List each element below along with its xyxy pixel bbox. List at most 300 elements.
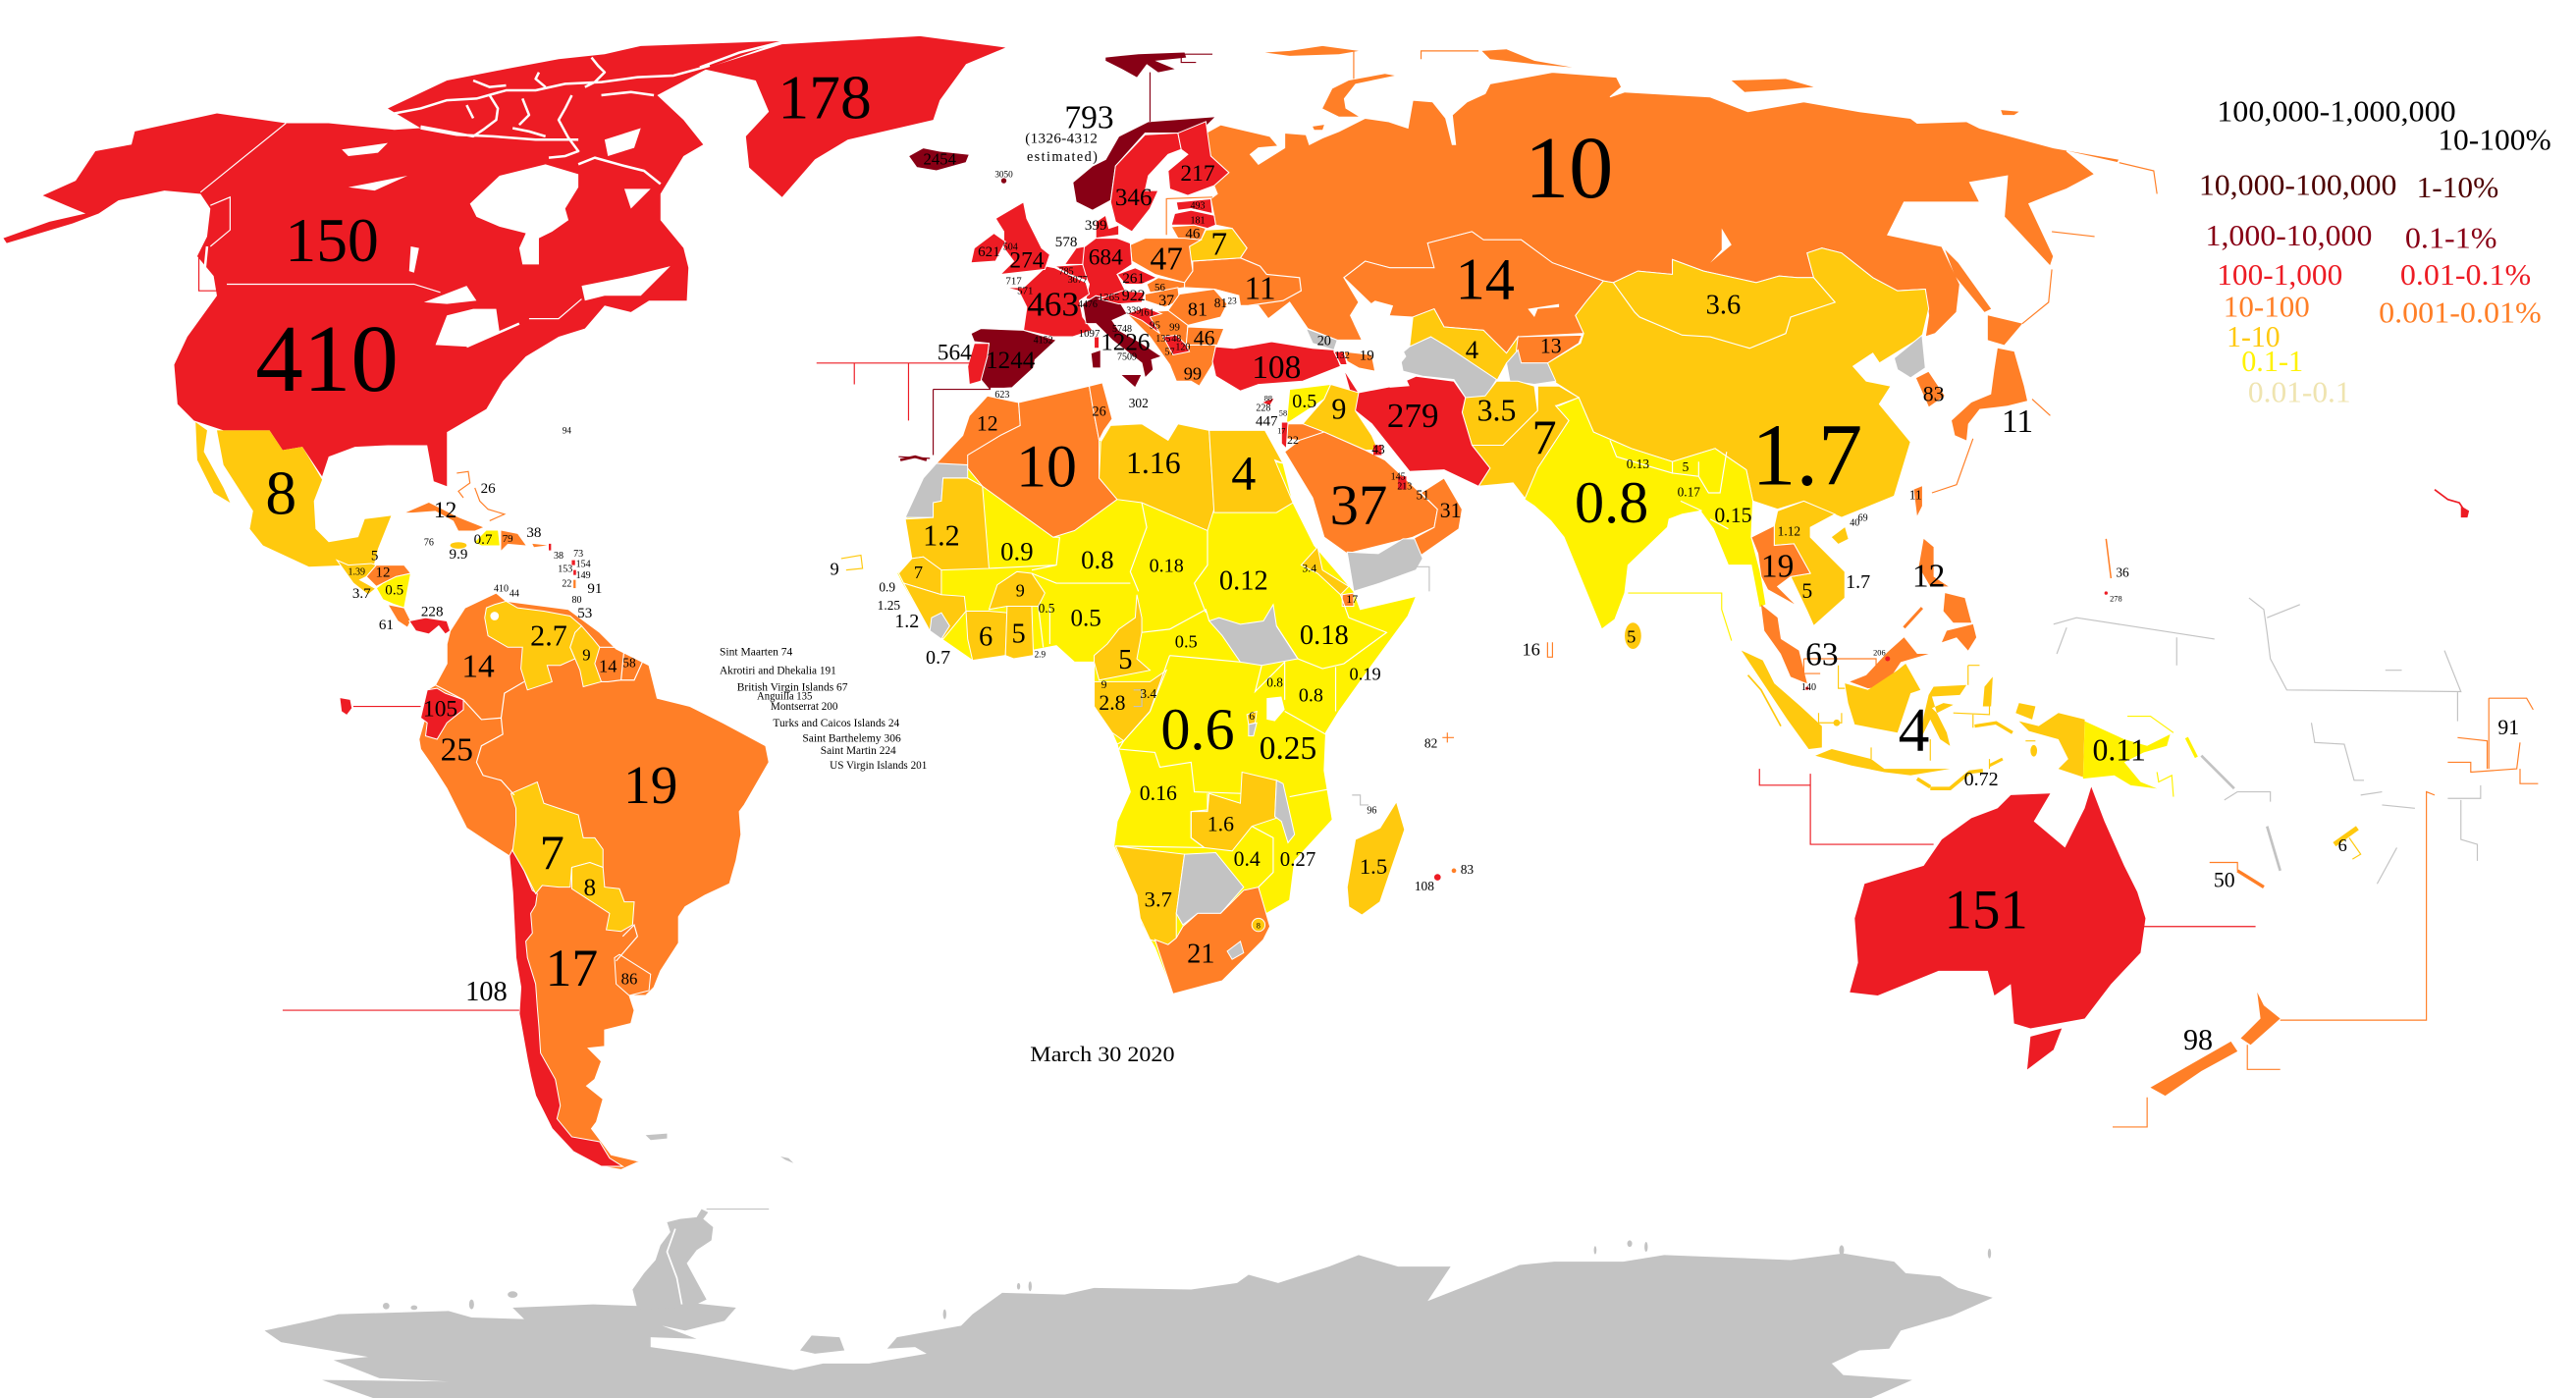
Indochina xyxy=(1774,501,1845,626)
Burkina Faso xyxy=(989,571,1045,610)
Portugal xyxy=(968,344,989,385)
Caribbean and Central America values: 0.7 xyxy=(474,532,493,548)
Svalbard xyxy=(1105,53,1186,78)
Sumatra xyxy=(1742,651,1822,749)
European values xyxy=(924,149,1276,410)
Central and Southern Africa values: 96 xyxy=(1367,805,1376,816)
Caribbean and Central America values: 5 xyxy=(371,549,378,565)
European values: 46 xyxy=(1194,326,1215,350)
Denmark xyxy=(1096,215,1119,239)
Caribbean and Central America values: 12 xyxy=(375,565,391,580)
North and West Africa values: 0.7 xyxy=(926,647,950,669)
Philippines Luzon xyxy=(1919,539,1949,586)
Ivory Coast xyxy=(966,611,1007,661)
value labels: Asia xyxy=(1252,118,2129,790)
large Asian values: 3.5 xyxy=(1477,393,1516,427)
smaller Asian values: 19 xyxy=(1360,348,1374,363)
text block: small territories list: Montserrat 200 xyxy=(771,700,838,713)
Australia xyxy=(1850,787,2145,1029)
Bolivia xyxy=(511,782,603,893)
Western Sahara xyxy=(905,463,968,517)
Tasmania xyxy=(2027,1029,2062,1069)
smaller Asian values: 31 xyxy=(1440,499,1462,522)
Armenia xyxy=(1334,351,1347,364)
Caribbean and Central America values: 58 xyxy=(622,655,636,670)
date caption: March 30 2020 xyxy=(1030,1043,1175,1066)
Hawaii xyxy=(2435,490,2466,512)
value labels: Europe xyxy=(924,100,1276,410)
Czechia xyxy=(1117,268,1156,284)
value labels: Oceania xyxy=(1945,716,2519,1056)
smaller Asian values: 4 xyxy=(1466,335,1478,364)
Balkans xyxy=(1127,310,1215,386)
smaller Asian values: 0.5 xyxy=(1292,391,1316,412)
North and West Africa values: 7 xyxy=(914,563,923,582)
value labels: Americas xyxy=(255,62,872,1007)
Sakhalin xyxy=(1945,249,1991,312)
Germany xyxy=(1083,239,1132,304)
smaller Asian values: 5 xyxy=(1627,626,1636,646)
legend: 0.01-0.1 xyxy=(2248,375,2351,408)
panel: South America xyxy=(283,593,793,1169)
smaller Asian values: 20 xyxy=(1317,333,1331,349)
Afghanistan xyxy=(1462,381,1537,445)
Caribbean and Central America values: 3.7 xyxy=(352,586,371,602)
Lithuania xyxy=(1171,225,1206,240)
smaller Asian values: 36 xyxy=(2116,565,2129,579)
Russia and Ukraine xyxy=(1185,73,2120,340)
European values: 181 xyxy=(1190,216,1205,227)
Guinea xyxy=(903,583,966,639)
Bangka dot xyxy=(1834,720,1840,726)
Madagascar xyxy=(1347,802,1405,915)
Antarctic islets xyxy=(383,1240,1991,1319)
North and West Africa values: 0.5 xyxy=(1071,606,1101,632)
Indonesia: Kalimantan xyxy=(1845,664,1920,732)
panel: Antarctica xyxy=(265,1210,1993,1398)
Central and Southern Africa values: 108 xyxy=(1415,879,1434,893)
Yemen xyxy=(1347,539,1422,591)
Faroe xyxy=(1001,178,1006,184)
European values: 7509 xyxy=(1117,351,1137,362)
text block: small territories list xyxy=(720,646,927,772)
European values: 1097 xyxy=(1079,328,1100,340)
Caribbean and Central America values: 91 xyxy=(587,581,602,597)
smaller Asian values: 58 xyxy=(1279,408,1287,417)
Africa yellow base xyxy=(897,440,1417,994)
Caspian Sea xyxy=(1354,300,1410,388)
Norway note xyxy=(1025,100,1114,165)
Poland xyxy=(1130,239,1201,283)
Djibouti xyxy=(1342,593,1354,606)
Romania xyxy=(1168,290,1227,325)
Falkland Islands xyxy=(646,1134,667,1140)
Egypt xyxy=(1209,430,1293,512)
smaller Asian values: 19 xyxy=(1761,548,1794,584)
North and West Africa values: 0.5 xyxy=(1175,631,1198,651)
European values: 135 xyxy=(1155,334,1170,345)
Lesotho xyxy=(1227,941,1244,959)
Central and Southern Africa values: 0.19 xyxy=(1350,665,1381,684)
European values: 120 xyxy=(1175,342,1190,352)
Central and Southern Africa values: 0.8 xyxy=(1299,685,1323,707)
Finland xyxy=(1168,122,1229,195)
legend: 0.1-1 xyxy=(2241,345,2303,378)
European values: 4152 xyxy=(1034,336,1053,347)
Croatia xyxy=(1127,307,1161,334)
African borders xyxy=(989,503,1386,887)
Slovakia xyxy=(1147,278,1185,293)
Antarctic continent xyxy=(265,1254,1993,1398)
North and West Africa values: 0.9 xyxy=(879,579,895,594)
large Asian values: 4 xyxy=(1899,695,1929,765)
Eritrea xyxy=(1301,547,1349,595)
Foxe Basin, Ungava Bay, Gulf of St Lawrence, large lakes xyxy=(342,129,671,347)
Caribbean and Central America values: 9 xyxy=(831,560,839,579)
North and West Africa values: 4 xyxy=(1231,446,1256,501)
European values: 274 xyxy=(1009,248,1045,274)
North and West Africa values xyxy=(878,403,1358,675)
Caribbean and Central America values: 53 xyxy=(577,606,592,621)
North and West Africa values: 0.5 xyxy=(1039,601,1055,616)
legend: 10,000-100,000 xyxy=(2199,168,2396,201)
borders Canada US Alaska xyxy=(200,123,581,319)
legend: 100,000-1,000,000 xyxy=(2217,94,2456,128)
Oman xyxy=(1413,478,1462,556)
Caribbean and Central America values: 154 xyxy=(576,559,591,569)
Socotra and Indian Ocean islands xyxy=(1415,566,1429,591)
New Zealand North Island xyxy=(2241,993,2281,1045)
Canary and Atlantic islands xyxy=(900,457,927,460)
European values: 7 xyxy=(1210,226,1227,262)
North and West Africa values: 17 xyxy=(1346,593,1358,606)
South Shetland connector xyxy=(707,1209,769,1210)
Norway note: (1326-4312 xyxy=(1025,132,1098,147)
European values: 47 xyxy=(1150,241,1183,277)
Caribbean and Central America values: 94 xyxy=(563,426,571,436)
Philippines Visayas xyxy=(1944,593,1971,622)
European values: 81 xyxy=(1188,298,1208,320)
Morocco xyxy=(937,396,1020,465)
Central America xyxy=(337,561,451,634)
Malay peninsula xyxy=(1761,605,1807,683)
Malaysian Borneo xyxy=(1850,637,1929,688)
North and West Africa values: 9 xyxy=(1016,580,1025,600)
European values: 23 xyxy=(1228,296,1237,306)
North and West Africa values: 0.9 xyxy=(1000,537,1034,566)
legend: 10-100% xyxy=(2438,124,2551,157)
internal borders xyxy=(436,647,642,961)
text block: small territories list: Sint Maarten 74 xyxy=(720,646,792,659)
Central and Southern Africa values: 1.5 xyxy=(1360,854,1387,879)
Brazil and continent base xyxy=(419,593,769,1169)
European values: 922 xyxy=(1122,288,1146,304)
Ukraine border xyxy=(1214,258,1301,312)
large Asian values: 1.7 xyxy=(1751,405,1862,505)
Korea xyxy=(1894,335,1925,378)
smaller Asian values: 13 xyxy=(1540,335,1562,358)
European values: 1226 xyxy=(1100,329,1150,355)
Azerbaijan xyxy=(1344,351,1375,371)
panel: North America xyxy=(3,36,1005,634)
Zambia xyxy=(1191,772,1276,851)
large country values: 108 xyxy=(465,977,508,1007)
Fiji xyxy=(2334,828,2357,844)
text block: small territories list: British Virgin Islands 67 xyxy=(737,680,848,693)
Caribbean and Central America values: 9 xyxy=(582,646,591,665)
Iran xyxy=(1344,369,1490,486)
European values: 11 xyxy=(1244,271,1276,307)
Mongolia border xyxy=(1613,278,1835,349)
Caribbean and Central America values: 80 xyxy=(571,595,581,606)
New Britain and Solomon links xyxy=(2127,717,2174,797)
North and West Africa values: 0.8 xyxy=(1081,545,1114,574)
European values: 95 xyxy=(1150,320,1160,332)
North and West Africa values: 0.18 xyxy=(1300,620,1349,651)
text block: small territories list: Saint Barthelemy 306 xyxy=(802,732,901,745)
large Asian values: 10 xyxy=(1525,118,1613,217)
large Asian values: 279 xyxy=(1387,397,1439,435)
smaller Asian values: 132 xyxy=(1335,350,1350,361)
European values: 1244 xyxy=(986,348,1036,374)
Caribbean and Central America values: 79 xyxy=(503,533,513,545)
European values: 3077 xyxy=(1068,275,1088,286)
European values: 504 xyxy=(1003,242,1018,252)
Iceland xyxy=(908,148,969,171)
Indonesian thin connectors xyxy=(1818,666,2035,769)
island connector lines xyxy=(1354,51,2157,493)
Tunisia xyxy=(1090,383,1112,440)
legend: 100-1,000 xyxy=(2217,258,2342,292)
Berkner Island xyxy=(800,1335,844,1354)
Aru Islands xyxy=(2030,745,2037,757)
Bird's Head Papua xyxy=(2015,703,2035,720)
legend: 0.1-1% xyxy=(2405,221,2497,254)
Namibia xyxy=(1115,846,1185,944)
Bulgaria xyxy=(1186,327,1224,345)
large country values: 7 xyxy=(540,825,564,880)
panel: Southeast Asia and Oceania xyxy=(1742,490,2538,1127)
Aral Sea xyxy=(1528,304,1559,317)
Ceram xyxy=(1974,723,2012,732)
Caribbean and Central America values: 149 xyxy=(576,570,591,581)
connector lines xyxy=(1759,769,2256,927)
Mexico xyxy=(217,430,391,575)
text block: small territories list: Turks and Caicos Islands 24 xyxy=(773,717,899,729)
smaller Asian values: 43 xyxy=(1371,442,1385,457)
legend: 0.001-0.01% xyxy=(2379,296,2542,329)
Chile xyxy=(510,849,622,1166)
Caribbean and Central America values: 9.9 xyxy=(450,547,467,563)
smaller Asian values: 0.13 xyxy=(1627,457,1649,471)
Italy xyxy=(1083,296,1161,378)
large Asian values xyxy=(1252,118,1929,765)
Central and Southern Africa values: 2.8 xyxy=(1099,691,1126,715)
Central and Southern Africa values: 9 xyxy=(1101,678,1107,691)
Sweden xyxy=(1110,134,1181,232)
Pacific orange island chains xyxy=(2447,698,2538,783)
Greenland xyxy=(703,36,1005,197)
New Caledonia xyxy=(2210,862,2237,871)
value labels: Oceania: 6 xyxy=(2338,835,2347,855)
large country values: 19 xyxy=(623,755,677,815)
Central and Southern Africa values xyxy=(1099,640,1540,970)
Venezuela xyxy=(485,601,581,690)
Senegal xyxy=(898,557,941,595)
Central and Southern Africa values: 0.4 xyxy=(1234,847,1261,871)
North and West Africa values: 0.12 xyxy=(1219,566,1268,597)
Mauritania xyxy=(905,478,989,570)
Caribbean and Central America values: 76 xyxy=(424,538,434,549)
Norway note: estimated) xyxy=(1027,149,1098,165)
North and West Africa values: 1.2 xyxy=(894,611,919,632)
North and West Africa values: 6 xyxy=(979,622,993,653)
France xyxy=(1005,266,1093,337)
North and West Africa values: 0.18 xyxy=(1150,555,1184,576)
Philippines Mindanao xyxy=(1942,624,1976,651)
Caribbean and Central America values: 61 xyxy=(379,618,394,633)
connectors Europe xyxy=(898,54,1212,458)
smaller Asian values: 40 xyxy=(1850,517,1859,528)
connector line xyxy=(199,256,217,291)
Central and Southern Africa values: 83 xyxy=(1461,862,1474,877)
Belarus xyxy=(1190,229,1247,261)
Thailand xyxy=(1751,525,1810,606)
Iraq xyxy=(1303,385,1378,450)
New Zealand South Island xyxy=(2150,1042,2237,1096)
large country values: 105 xyxy=(423,697,457,723)
smaller Asian values: 88 xyxy=(1264,394,1272,403)
North and West Africa values: 5 xyxy=(1118,645,1132,675)
Caribbean and Central America values: 14 xyxy=(599,656,617,675)
smaller Asian values: 0.15 xyxy=(1714,504,1752,527)
Guyana xyxy=(570,626,602,686)
text block: small territories list: Anguilla 135 xyxy=(757,690,813,703)
European values: 684 xyxy=(1089,244,1123,270)
Central and Southern Africa values: 3.4 xyxy=(1140,686,1156,701)
European values: 2454 xyxy=(924,149,957,168)
smaller Asian values: 228 xyxy=(1256,403,1270,413)
Paraguay xyxy=(571,862,634,932)
European values: 785 xyxy=(1059,266,1074,277)
European values: 57 xyxy=(1165,347,1175,357)
Caribbean and Central America values: 12 xyxy=(434,498,456,523)
European values: 623 xyxy=(994,390,1009,401)
large country values: 17 xyxy=(546,939,598,997)
value labels: Oceania: 151 xyxy=(1945,879,2028,941)
Norway xyxy=(1073,117,1215,210)
smaller Asian values: 145 xyxy=(1391,472,1406,483)
large country values: 8 xyxy=(265,458,296,528)
smaller Asian values: 63 xyxy=(1805,637,1839,673)
Turkmenistan xyxy=(1400,337,1497,398)
smaller Asian values: 22 xyxy=(1287,434,1299,447)
European values: 493 xyxy=(1190,201,1205,212)
smaller Asian values: 0.72 xyxy=(1964,769,1999,790)
legend: 1-10% xyxy=(2417,171,2498,204)
Turkey xyxy=(1212,342,1341,391)
Central and Southern Africa values: 1.6 xyxy=(1208,813,1234,836)
European values: 4476 xyxy=(1078,299,1098,310)
Antarctic Peninsula xyxy=(632,1210,713,1310)
peninsula inner channel xyxy=(667,1229,682,1305)
China xyxy=(1547,248,1929,517)
Botswana xyxy=(1176,852,1244,925)
Ghana xyxy=(1005,606,1034,659)
Sicily and Sardinia xyxy=(1120,375,1142,388)
Papua New Guinea xyxy=(2083,722,2171,788)
value labels: Africa xyxy=(878,403,1540,970)
Eswatini xyxy=(1252,918,1265,932)
Corsica xyxy=(1095,337,1100,349)
European values: 339 xyxy=(1126,306,1141,317)
Spain xyxy=(971,329,1056,390)
Albania and Kosovo xyxy=(1163,335,1190,354)
smaller Asian values xyxy=(1256,333,2129,790)
European values: 621 xyxy=(978,244,1000,260)
Liberia xyxy=(930,613,949,639)
smaller Asian values: 140 xyxy=(1801,682,1816,693)
value labels: Oceania: 98 xyxy=(2183,1023,2213,1056)
Lake Baikal xyxy=(1710,229,1732,263)
legend: 1,000-10,000 xyxy=(2206,219,2372,252)
Palawan xyxy=(1904,608,1922,627)
Java and Lesser Sunda xyxy=(1815,749,1950,776)
European values: 48 xyxy=(1171,334,1181,345)
Pakistan xyxy=(1472,386,1579,498)
Burundi xyxy=(1247,712,1257,725)
smaller Asian values: 0.17 xyxy=(1678,484,1700,499)
Saudi Arabia xyxy=(1285,432,1437,554)
Israel xyxy=(1281,422,1288,449)
Labuan and Singapore dots xyxy=(1805,656,1890,690)
Caribbean and Central America values: 410 xyxy=(494,583,509,594)
European values: 37 xyxy=(1158,293,1174,309)
smaller Asian values: 17 xyxy=(1277,427,1285,436)
large country values xyxy=(255,62,872,1007)
European values: 1265 xyxy=(1099,292,1119,303)
Galapagos xyxy=(340,698,351,715)
large country values: 8 xyxy=(584,875,596,901)
Caribbean and Central America values: 1.39 xyxy=(348,567,365,578)
European values: 261 xyxy=(1122,271,1145,287)
panel: Asia xyxy=(1212,46,2157,683)
Caribbean and Central America values: 153 xyxy=(558,564,572,574)
Papua xyxy=(2019,713,2085,777)
smaller Asian values: 51 xyxy=(1417,488,1429,503)
smaller Asian values: 447 xyxy=(1256,413,1278,429)
large country values: 25 xyxy=(441,732,473,769)
Tajikistan xyxy=(1507,350,1556,385)
European values: 571 xyxy=(1017,286,1033,297)
smaller Asian values: 1.7 xyxy=(1846,571,1870,593)
smaller Asian values: 9 xyxy=(1331,393,1346,426)
Arctic channels xyxy=(204,58,710,347)
smaller Asian values: 11 xyxy=(2002,403,2033,440)
Syria xyxy=(1286,385,1331,424)
Caribbean and Central America values: 73 xyxy=(573,549,583,560)
European values: 346 xyxy=(1115,185,1153,211)
Caribbean and Central America values: 228 xyxy=(421,604,443,619)
Hudson Bay xyxy=(470,164,578,264)
Gabon and Congo xyxy=(1095,671,1166,741)
Netherlands xyxy=(1064,246,1085,264)
Belgium xyxy=(1054,264,1088,281)
Taiwan xyxy=(1914,486,1922,515)
text block: small territories list: US Virgin Islands 201 xyxy=(830,759,927,772)
European values: 463 xyxy=(1027,285,1079,323)
large Asian values: 108 xyxy=(1252,350,1301,386)
